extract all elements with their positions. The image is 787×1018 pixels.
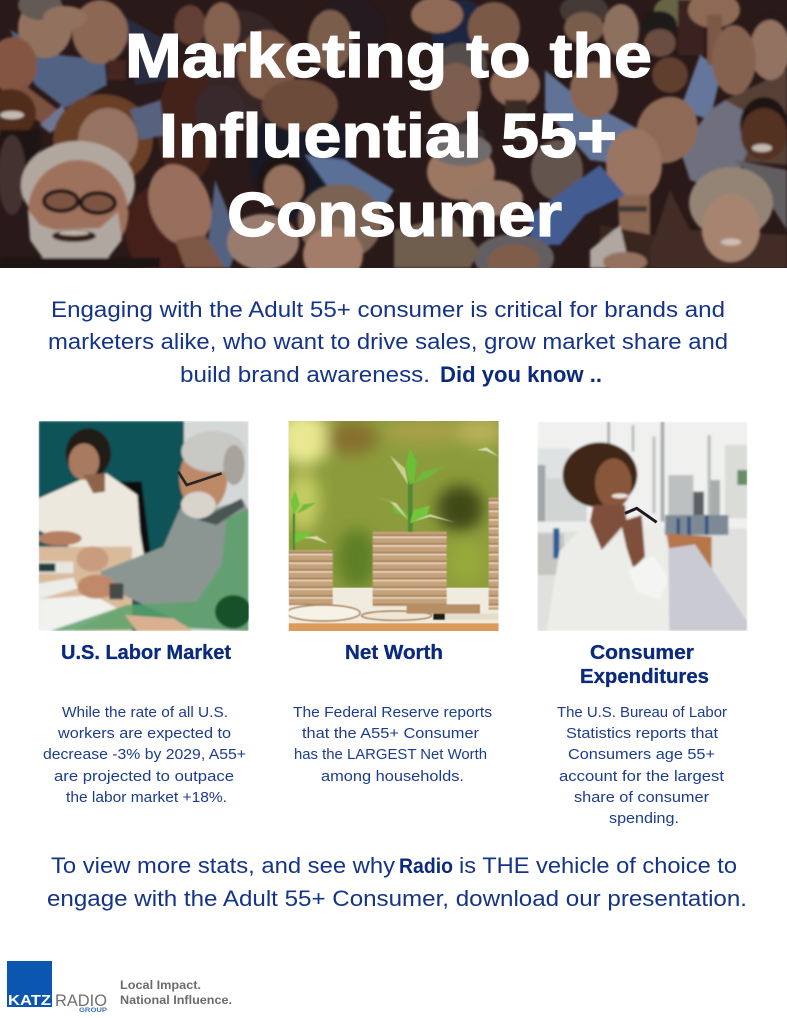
call to action paragraph: is THE vehicle of choice to	[459, 853, 737, 878]
right half	[411, 0, 463, 33]
intro paragraph: Engaging with the Adult 55+ consumer is critical for brands and	[51, 297, 725, 322]
heading: Consumer Expenditures: Expenditures	[580, 665, 709, 688]
body text: labor market: are projected to outpace	[54, 768, 234, 785]
intro paragraph: build brand awareness.	[180, 362, 430, 387]
body text: consumer expenditures: account for the largest	[559, 768, 725, 785]
logo: Katz Radio Group	[7, 961, 108, 1014]
body text: labor market	[43, 704, 246, 806]
logo: Katz Radio Group: RADIO	[55, 991, 107, 1010]
body text: consumer expenditures: Consumers age 55+	[568, 746, 715, 763]
tagline	[120, 978, 232, 1007]
call to action paragraph: Radio	[399, 854, 453, 878]
heading: Consumer Expenditures	[580, 641, 709, 688]
panel: U.S. Labor Market	[38, 421, 252, 806]
body text: net worth: The Federal Reserve reports	[293, 704, 492, 721]
plants	[291, 447, 499, 550]
tagline: National Influence.	[120, 993, 232, 1007]
intro paragraph: marketers alike, who want to drive sales, grow market share and	[48, 329, 728, 354]
panel: Consumer Expenditures	[537, 422, 747, 827]
photo: seedlings on coin stacks	[288, 421, 499, 631]
body text: consumer expenditures: The U.S. Bureau of Labor	[557, 704, 727, 721]
body text: net worth: has the LARGEST Net Worth	[294, 746, 487, 763]
body text: labor market: workers are expected to	[57, 725, 231, 742]
title: Marketing to the	[125, 22, 652, 91]
heading: Net Worth: Net Worth	[345, 641, 443, 664]
body text: labor market: decrease -3% by 2029, A55+	[43, 746, 246, 763]
logo: Katz Radio Group: GROUP	[79, 1007, 108, 1014]
body text: consumer expenditures: Statistics reports that	[566, 725, 719, 742]
photo: woman with shopping bags	[537, 422, 747, 631]
crowd photo	[0, 0, 787, 283]
panel: Net Worth	[277, 412, 503, 785]
body text: consumer expenditures: share of consumer	[574, 789, 709, 806]
body text: labor market: While the rate of all U.S.	[62, 704, 228, 721]
heading: U.S. Labor Market: U.S. Labor Market	[61, 641, 231, 664]
body text: net worth: that the A55+ Consumer	[302, 725, 479, 742]
title: Influential 55+	[159, 102, 617, 171]
photo: two men at a meeting table	[38, 421, 252, 631]
body text: consumer expenditures	[557, 704, 727, 827]
logo: Katz Radio Group: KATZ	[8, 992, 51, 1009]
call to action paragraph: engage with the Adult 55+ Consumer, download our presentation.	[47, 886, 747, 911]
heading: Consumer Expenditures: Consumer	[590, 641, 694, 664]
call to action paragraph	[47, 853, 747, 911]
body text: labor market: the labor market +18%.	[66, 789, 227, 806]
hero banner: crowd photo with title	[0, 0, 787, 283]
intro paragraph: Did you know ..	[440, 362, 602, 387]
tagline: Local Impact.	[120, 978, 201, 992]
body text: consumer expenditures: spending.	[609, 810, 679, 827]
call to action paragraph: To view more stats, and see why	[51, 853, 396, 878]
title: Consumer	[227, 181, 562, 250]
body text: net worth: among households.	[321, 768, 464, 785]
body text: net worth	[293, 704, 492, 785]
intro paragraph	[48, 297, 728, 387]
coins	[287, 498, 499, 621]
title	[125, 22, 652, 250]
